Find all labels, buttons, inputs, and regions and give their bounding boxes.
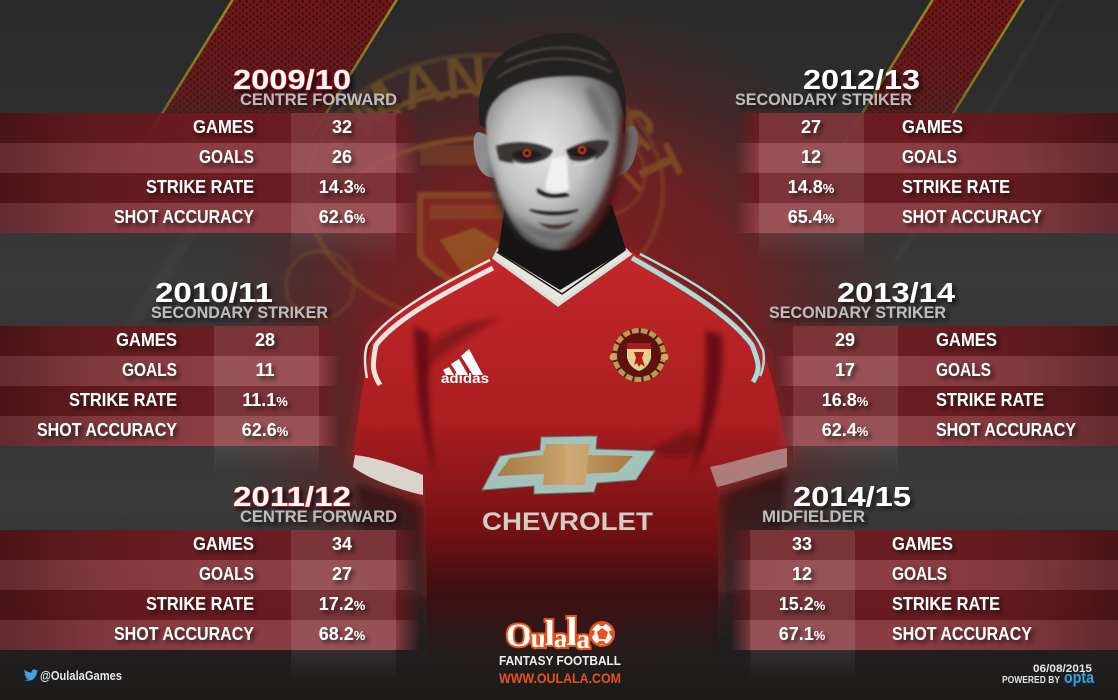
- logo wordmark: a: [576, 624, 590, 654]
- heading: SECONDARY STRIKER: [735, 90, 912, 109]
- stats: 12: [801, 147, 821, 167]
- stats: STRIKE RATE: [146, 177, 254, 197]
- red rim glow: [350, 252, 790, 600]
- heading: 2012/13: [803, 64, 920, 95]
- stats: GOALS: [936, 360, 991, 380]
- stats: GAMES: [936, 330, 997, 350]
- stats: STRIKE RATE: [892, 594, 1000, 614]
- stats: GAMES: [902, 117, 963, 137]
- ears: [474, 126, 638, 178]
- stats: GAMES: [892, 534, 953, 554]
- jersey shading: [414, 325, 436, 475]
- stats: 11: [255, 360, 275, 380]
- heading: SECONDARY STRIKER: [151, 303, 328, 322]
- heading: CENTRE FORWARD: [240, 507, 397, 526]
- stats: 12: [792, 564, 812, 584]
- collar: [494, 250, 630, 305]
- Oulala logo: [499, 609, 621, 686]
- logo wordmark: u: [531, 623, 546, 653]
- stats: SHOT ACCURACY: [114, 207, 254, 227]
- stats: STRIKE RATE: [902, 177, 1010, 197]
- stats: GAMES: [193, 534, 254, 554]
- eyes: [522, 146, 586, 158]
- panel: 2013/14: [770, 282, 1118, 459]
- stats: 62.6%: [242, 420, 289, 440]
- stats: [779, 534, 1032, 644]
- logo wordmark: a: [554, 623, 568, 653]
- logo wordmark: l: [545, 613, 555, 653]
- stats: 27: [801, 117, 821, 137]
- brows and eye sockets: [496, 140, 609, 168]
- stats: 27: [332, 564, 352, 584]
- jersey: [353, 250, 787, 670]
- heading: MIDFIELDER: [762, 507, 865, 526]
- heading: [735, 64, 920, 109]
- mouth: [530, 210, 578, 229]
- icon: twitter bird: [24, 669, 38, 681]
- heading: 2014/15: [793, 481, 911, 512]
- heading: SECONDARY STRIKER: [769, 303, 946, 322]
- panel: 2014/15: [732, 486, 1118, 664]
- left shoulder stripes: [373, 268, 493, 385]
- hair: [479, 33, 626, 135]
- panel: 2012/13: [736, 69, 1118, 246]
- stats: SHOT ACCURACY: [902, 207, 1042, 227]
- stats: 16.8%: [822, 390, 869, 410]
- nose: [537, 156, 570, 198]
- date and Opta credit: 06/08/2015: [1033, 663, 1092, 675]
- heading: 2010/11: [155, 277, 273, 308]
- stats: 14.8%: [788, 177, 835, 197]
- stats: GOALS: [902, 147, 957, 167]
- red diagonal stripe right: [861, 0, 1025, 113]
- stats: 17: [835, 360, 855, 380]
- logo wordmark: O: [506, 618, 532, 654]
- stubble and jaw shading: [490, 160, 555, 250]
- panel: 2009/10: [0, 68, 416, 246]
- face: [486, 76, 623, 250]
- heading: [233, 64, 397, 109]
- stats: 15.2%: [779, 594, 826, 614]
- Chevrolet wordmark: CHEVROLET: [482, 508, 653, 536]
- logo wordmark: l: [566, 609, 577, 654]
- stats: 28: [255, 330, 275, 350]
- stats: 65.4%: [788, 207, 835, 227]
- Chevrolet bowtie logo: [482, 436, 655, 494]
- stats: GOALS: [199, 564, 254, 584]
- stats: SHOT ACCURACY: [37, 420, 177, 440]
- stats: 14.3%: [319, 177, 366, 197]
- stats: 29: [835, 330, 855, 350]
- stats: [788, 117, 1042, 227]
- stats: [822, 330, 1076, 440]
- stats: 62.6%: [319, 207, 366, 227]
- right shoulder stripes: [632, 258, 758, 382]
- Opta logo: opta: [1064, 668, 1094, 687]
- stats: SHOT ACCURACY: [114, 624, 254, 644]
- Manchester United badge: [610, 328, 668, 382]
- stats: 32: [332, 117, 352, 137]
- arms: [357, 472, 786, 660]
- adidas logo: adidas: [441, 370, 489, 386]
- hair highlights: [497, 48, 612, 78]
- heading: [762, 481, 911, 526]
- stats: 33: [792, 534, 812, 554]
- stats: GOALS: [892, 564, 947, 584]
- stats: [114, 534, 366, 644]
- stats: 17.2%: [319, 594, 366, 614]
- heading: [233, 481, 397, 526]
- date and Opta credit: [1002, 663, 1094, 687]
- stats: 67.1%: [779, 624, 826, 644]
- stats: GOALS: [199, 147, 254, 167]
- stats: STRIKE RATE: [146, 594, 254, 614]
- icon: football: [589, 621, 615, 647]
- heading: [769, 277, 955, 322]
- stats: STRIKE RATE: [69, 390, 177, 410]
- heading: [151, 277, 328, 322]
- stats: [114, 117, 366, 227]
- panel: 2010/11: [0, 282, 337, 458]
- date and Opta credit: POWERED BY: [1002, 675, 1060, 686]
- heading: 2011/12: [233, 481, 351, 512]
- sleeve cuffs: [353, 455, 423, 495]
- heading: 2013/14: [837, 277, 955, 308]
- neck: [498, 205, 626, 290]
- stats: 62.4%: [822, 420, 869, 440]
- stats: [37, 330, 289, 440]
- website: WWW.OULALA.COM: [499, 671, 621, 686]
- stats: SHOT ACCURACY: [892, 624, 1032, 644]
- stats: STRIKE RATE: [936, 390, 1044, 410]
- panel: 2011/12: [0, 485, 418, 664]
- red diagonal stripe left: [161, 0, 398, 113]
- tagline: FANTASY FOOTBALL: [499, 653, 621, 668]
- twitter handle: @OulalaGames: [40, 669, 122, 683]
- heading: 2009/10: [233, 64, 351, 95]
- player: Wayne Rooney illustration: [350, 33, 790, 670]
- stats: SHOT ACCURACY: [936, 420, 1076, 440]
- stats: GAMES: [193, 117, 254, 137]
- stats: GAMES: [116, 330, 177, 350]
- club crest watermark: [284, 52, 683, 320]
- stats: 68.2%: [319, 624, 366, 644]
- stats: 26: [332, 147, 352, 167]
- stats: GOALS: [122, 360, 177, 380]
- adidas logo: [441, 349, 489, 386]
- stats: 34: [332, 534, 352, 554]
- stats: 11.1%: [242, 390, 288, 410]
- heading: CENTRE FORWARD: [240, 90, 397, 109]
